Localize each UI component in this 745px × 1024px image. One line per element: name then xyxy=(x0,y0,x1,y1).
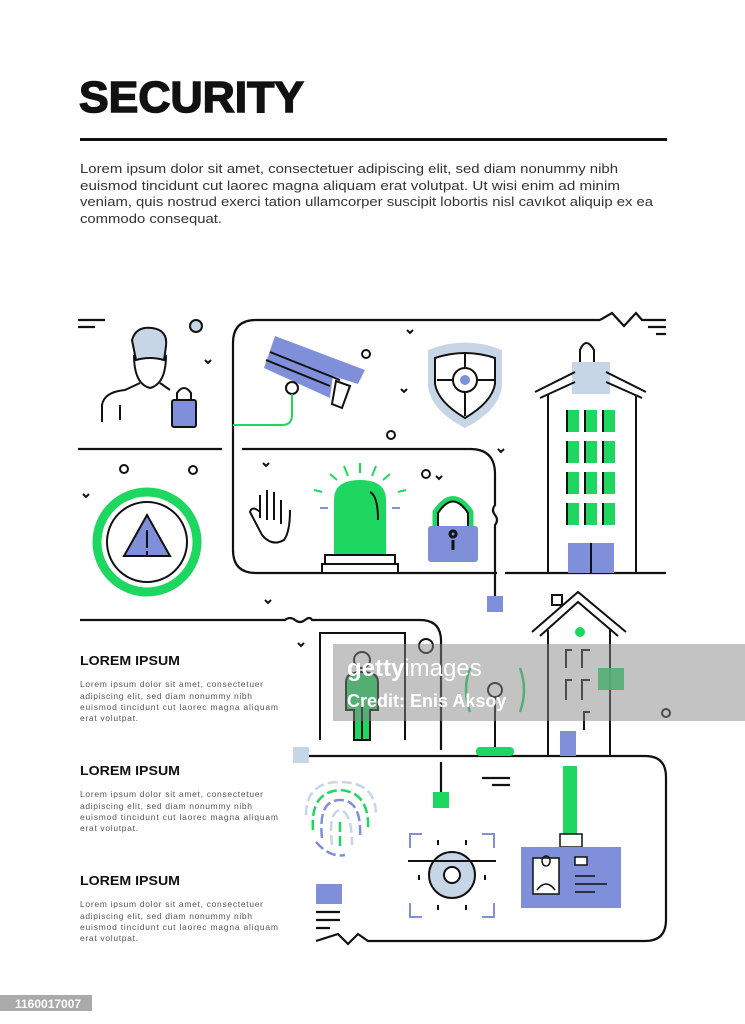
text block 2: LOREM IPSUM xyxy=(80,763,180,778)
connector squares xyxy=(293,596,576,904)
icon: office building xyxy=(535,343,646,573)
icon: fingerprint xyxy=(306,782,376,855)
text block 3: adipiscing elit, sed diam nonummy nibh xyxy=(80,911,252,921)
icon: warning sign xyxy=(97,492,197,592)
text block 1: euismod tincidunt cut laorec magna aliquam xyxy=(80,702,278,712)
decorative circles and chevrons xyxy=(83,320,670,717)
intro paragraph: euismod tincidunt cut laorec magna aliquam erat volutpat. Ut wisi enim ad minim xyxy=(80,178,620,193)
icon: face scan xyxy=(408,834,496,917)
text block 1: LOREM IPSUM xyxy=(80,653,180,668)
icon: hand xyxy=(250,490,290,543)
intro paragraph: commodo consequat. xyxy=(80,211,222,226)
icon: wifi sensor xyxy=(466,668,524,756)
text block 1: erat volutpat. xyxy=(80,713,138,723)
text block 2: Lorem ipsum dolor sit amet, consectetuer xyxy=(80,789,263,799)
watermark band: gettyimages xyxy=(347,655,482,682)
watermark band: Credit: Enis Aksoy xyxy=(347,691,506,711)
intro paragraph: Lorem ipsum dolor sit amet, consectetuer adipiscing elit, sed diam nonummy nibh xyxy=(80,161,618,176)
title: SECURITY xyxy=(79,73,304,122)
text block 1: adipiscing elit, sed diam nonummy nibh xyxy=(80,691,252,701)
intro paragraph xyxy=(80,161,654,226)
text block 3 xyxy=(80,873,278,943)
watermark band xyxy=(333,644,745,721)
text block 3: LOREM IPSUM xyxy=(80,873,180,888)
icon: house xyxy=(532,592,626,756)
footer id xyxy=(0,995,92,1011)
footer id: 1160017007 xyxy=(15,997,81,1011)
intro paragraph: veniam, quis nostrud exerci tation ullamcorper suscipit lobortis nisl cavıkot aliquip ex ea xyxy=(80,194,654,209)
text block 3: Lorem ipsum dolor sit amet, consectetuer xyxy=(80,899,263,909)
icon: id card xyxy=(521,766,621,908)
text block 2: adipiscing elit, sed diam nonummy nibh xyxy=(80,801,252,811)
icon: padlock xyxy=(428,498,478,562)
text block 2: erat volutpat. xyxy=(80,823,138,833)
text block 3: euismod tincidunt cut laorec magna aliquam xyxy=(80,922,278,932)
diagram frame lines xyxy=(78,313,666,944)
icon: body scanner door xyxy=(320,633,405,740)
text block 2 xyxy=(80,763,278,833)
text block 1 xyxy=(80,653,278,723)
icon: siren xyxy=(314,463,406,573)
text block 1: Lorem ipsum dolor sit amet, consectetuer xyxy=(80,679,263,689)
icon: person with lock xyxy=(102,328,196,427)
icon: cctv camera xyxy=(233,336,365,425)
icon: shield xyxy=(428,342,502,428)
text block 3: erat volutpat. xyxy=(80,933,138,943)
text block 2: euismod tincidunt cut laorec magna aliquam xyxy=(80,812,278,822)
